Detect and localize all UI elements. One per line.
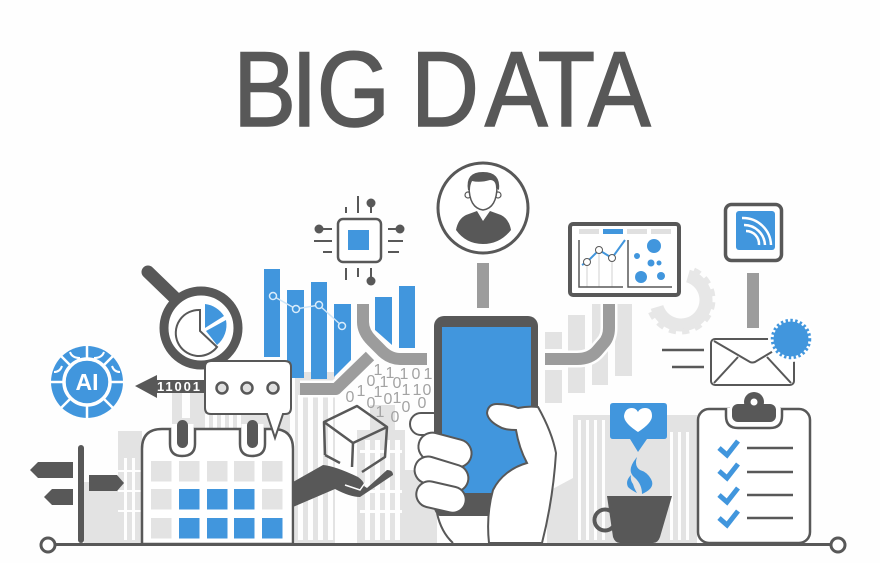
connectors to phone: [300, 263, 753, 389]
binary digits: 0: [384, 391, 393, 408]
binary digits: 0: [367, 395, 376, 412]
binary digits: 1: [386, 365, 395, 382]
binary digits: 1: [413, 382, 422, 399]
icon: user avatar: [438, 163, 528, 253]
binary digits: 0: [418, 395, 427, 412]
binary digits: 1: [380, 374, 389, 391]
icon: microchip: [314, 196, 404, 286]
binary digits: [346, 362, 433, 426]
icon: AI brain: [50, 345, 124, 419]
smartphone: [434, 316, 538, 517]
icon: magnifier with pie chart: [148, 272, 238, 365]
blue bar chart: [264, 269, 415, 379]
icon: top finger behind phone: [410, 413, 444, 435]
background city buildings: [84, 372, 697, 544]
icon: signpost: [30, 445, 124, 543]
icon: AI brain: AI: [76, 369, 98, 395]
icon: envelope with badge: [662, 316, 814, 385]
title: BIG DATA: [233, 30, 651, 149]
binary digits: 0: [346, 389, 355, 406]
icon: calendar: [142, 420, 293, 544]
hand holding phone: [411, 404, 556, 543]
binary digits: 1: [376, 404, 385, 421]
binary digits: 0: [423, 382, 432, 399]
icon: coffee cup: [594, 496, 672, 543]
binary digits: 0: [393, 375, 402, 392]
binary digits: 1: [374, 384, 383, 401]
base line: [41, 538, 845, 552]
binary digits: 1: [357, 383, 366, 400]
icon: steam: [627, 457, 652, 494]
arrow: 11001 data: [135, 375, 210, 398]
binary digits: 1: [374, 362, 383, 379]
arrow: 11001 data: 11001: [157, 379, 200, 394]
icon: clipboard checklist: [698, 392, 810, 543]
binary digits: 0: [391, 409, 400, 426]
icon: hand holding cube: [293, 406, 393, 507]
binary digits: 1: [393, 390, 402, 407]
binary digits: 0: [367, 373, 376, 390]
binary digits: 1: [402, 382, 411, 399]
speech bubble: [205, 361, 291, 438]
right light grey bars: [545, 304, 632, 403]
binary digits: 0: [412, 366, 421, 383]
binary digits: 1: [400, 366, 409, 383]
icon: heart speech bubble: [610, 403, 667, 452]
icon: rss feed: [726, 204, 782, 260]
binary digits: 0: [402, 399, 411, 416]
icon: dashboard tablet: [570, 224, 679, 295]
binary digits: 1: [424, 366, 433, 383]
gear: [651, 269, 712, 332]
